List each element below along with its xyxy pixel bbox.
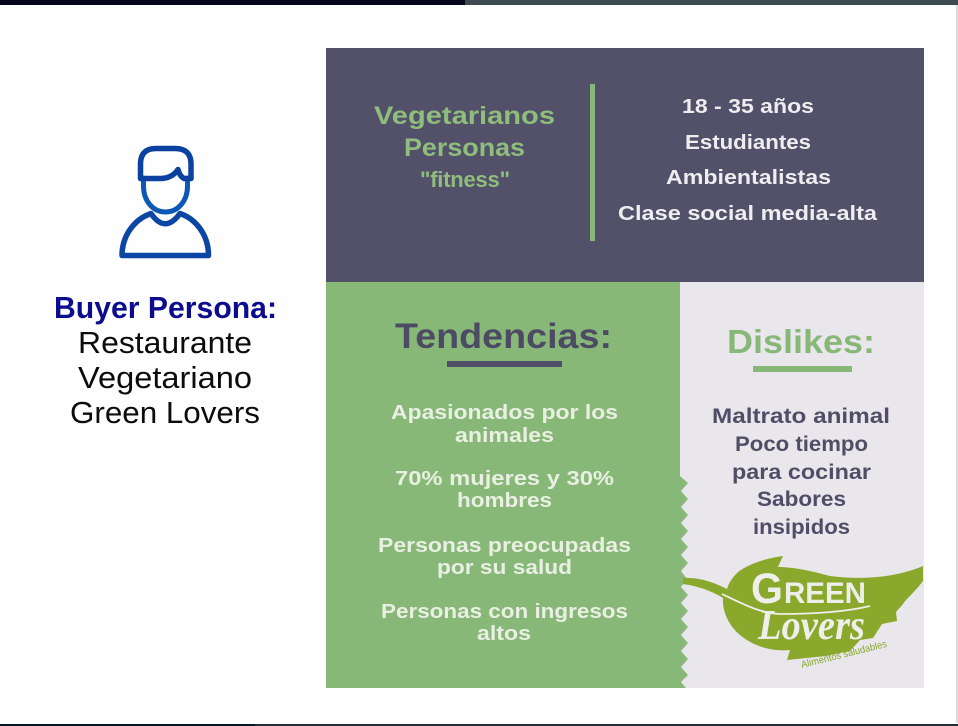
- logo: green lovers leaf: Lovers: [757, 603, 865, 649]
- panel: tendencias: Tendencias:: [395, 317, 612, 356]
- panel: profile header: [326, 48, 924, 282]
- logo: green lovers leaf: Alimentos saludables: [800, 639, 888, 671]
- logo: green lovers leaf: REEN: [784, 577, 866, 610]
- dislikes text: [712, 323, 890, 539]
- dislikes list: para cocinar: [732, 461, 871, 484]
- icon: person outline: [122, 148, 208, 256]
- segment labels: Personas: [404, 134, 525, 162]
- demographic list: [618, 96, 878, 225]
- panel: dislikes background: [680, 282, 924, 688]
- dislikes list: [712, 405, 890, 539]
- trends list: Personas con ingresos: [381, 601, 628, 623]
- trends list: Personas preocupadas: [378, 535, 631, 557]
- panel: tendencias: [326, 282, 688, 688]
- heading: buyer persona: Restaurante: [78, 325, 252, 360]
- demographic list: Clase social media-alta: [618, 203, 878, 225]
- heading: buyer persona: [54, 290, 277, 430]
- heading: buyer persona: Vegetariano: [78, 360, 252, 395]
- demographic list: Estudiantes: [685, 132, 811, 154]
- dislikes list: insipidos: [753, 516, 850, 539]
- trends list: 70% mujeres y 30%: [395, 468, 614, 490]
- segment labels: "fitness": [420, 167, 510, 192]
- demographic list: Ambientalistas: [666, 167, 831, 189]
- logo: green lovers leaf: [683, 556, 923, 671]
- segment labels: Vegetarianos: [374, 102, 555, 130]
- trends list: por su salud: [437, 557, 572, 579]
- trends list: animales: [455, 425, 554, 447]
- segment labels: [374, 102, 555, 192]
- trends list: altos: [477, 623, 531, 645]
- logo: green lovers leaf: G: [751, 565, 783, 613]
- trends list: Apasionados por los: [391, 402, 618, 424]
- dislikes list: Poco tiempo: [735, 433, 868, 456]
- dislikes list: Maltrato animal: [712, 405, 890, 428]
- demographic list: 18 - 35 años: [682, 96, 814, 118]
- dislikes list: Sabores: [757, 488, 846, 511]
- heading: buyer persona: Buyer Persona:: [54, 290, 277, 325]
- dislikes text: Dislikes:: [727, 323, 875, 360]
- trends list: [378, 402, 631, 645]
- heading: buyer persona: Green Lovers: [70, 395, 260, 430]
- trends list: hombres: [457, 490, 552, 512]
